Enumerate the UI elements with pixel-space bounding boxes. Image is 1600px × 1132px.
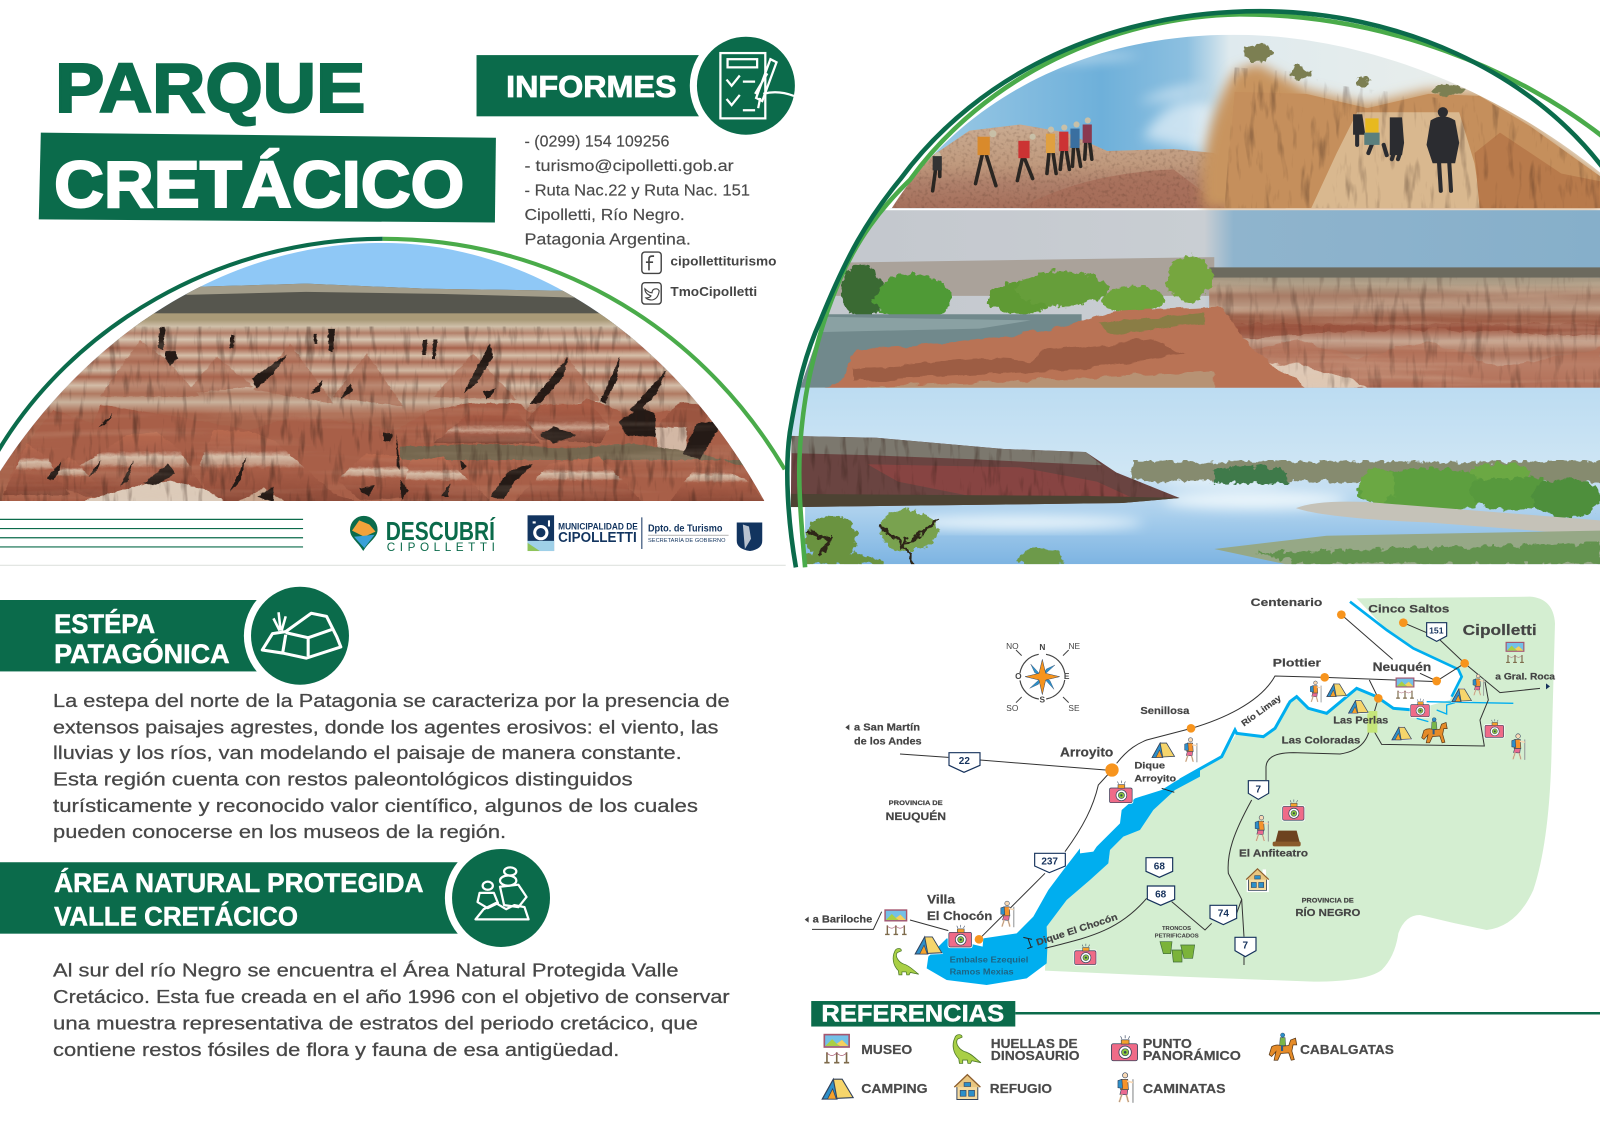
legend: referencias: DINOSAURIO [991, 1048, 1080, 1063]
contact information [524, 133, 750, 248]
map: compass [1006, 641, 1081, 713]
logo: Municipalidad de Cipolletti: CIPOLLETTI [558, 530, 637, 546]
map: place labels: a San Martín [854, 723, 920, 734]
map: place labels: Cinco Saltos [1368, 603, 1449, 615]
map: place labels: PROVINCIA DE [889, 800, 943, 807]
text block: Estepa description [53, 690, 730, 842]
title band: Cretácico: CRETÁCICO [54, 147, 464, 222]
map: place labels: PETRIFICADOS [1155, 934, 1199, 940]
icon: rocks and grass [262, 612, 341, 658]
legend: referencias: CAMINATAS [1143, 1081, 1226, 1096]
map: compass: N [1039, 642, 1045, 652]
map: reservoir and rivers [927, 602, 1513, 985]
map: compass: O [1015, 671, 1022, 681]
text block: Estepa description: La estepa del norte de la Patagonia se caracteriza por la presencia de [53, 690, 730, 711]
icon: amphitheatre rock [1273, 831, 1301, 846]
map: route numbers [959, 626, 1444, 952]
legend: referencias: HUELLAS DE [991, 1036, 1078, 1051]
map: place labels: TRONCOS [1162, 926, 1191, 932]
map: place labels: Las Perlas [1333, 716, 1389, 727]
map: place labels: Río Limay [1239, 693, 1283, 728]
logo: Descubrí Cipolletti [350, 516, 496, 554]
map: place labels: Ramos Mexias [950, 968, 1014, 977]
lower ridge [0, 398, 767, 503]
map: place labels: Plottier [1273, 658, 1322, 670]
upper pyramids [100, 340, 600, 410]
map: place labels: Dique [1134, 761, 1165, 771]
heading: Informes with icon [477, 30, 802, 142]
heading: Estepa Patagónica [0, 580, 356, 692]
heading: Estepa Patagónica: PATAGÓNICA [54, 639, 230, 669]
legend: referencias: PANORÁMICO [1143, 1048, 1241, 1063]
text block: Estepa description: pueden conocerse en los museos de la región. [53, 821, 506, 842]
text block: Área description: Al sur del río Negro se encuentra el Área Natural Protegida Valle [53, 960, 679, 981]
logo: Municipalidad de Cipolletti: Dpto. de Turismo [648, 524, 722, 535]
map: route numbers: 7 [1243, 941, 1249, 952]
photo row: hikers [890, 35, 1600, 210]
map: place labels: NEUQUÉN [886, 810, 946, 823]
photo row: river and canyon [796, 210, 1600, 394]
map: place labels: Embalse Ezequiel [950, 956, 1028, 965]
map: route numbers: 22 [959, 756, 970, 767]
map: place labels: Neuquén [1373, 660, 1431, 674]
photo row: river landscape [786, 388, 1600, 569]
legend: referencias: REFUGIO [990, 1081, 1052, 1096]
heading: Área Natural Protegida: ÁREA NATURAL PROTEGIDA [54, 868, 423, 898]
map: route numbers: 68 [1154, 861, 1165, 872]
map: place labels: Cipolletti [1463, 623, 1537, 639]
map: route shields [949, 623, 1447, 957]
heading: Estepa Patagónica: ESTÉPA [54, 609, 155, 639]
map: route numbers: 7 [1256, 784, 1262, 795]
legend: referencias [811, 1000, 1600, 1103]
photo: canyon dome [0, 243, 764, 501]
contact information: - turismo@cipolletti.gob.ar [524, 158, 734, 175]
map: land Río Negro [1045, 597, 1555, 982]
map: place labels: Dique El Chocón [1035, 912, 1119, 948]
text block: Estepa description: lluvias y los ríos, van modelando el paisaje de manera constante. [53, 742, 682, 763]
heading: Área Natural Protegida: VALLE CRETÁCICO [54, 902, 298, 932]
map: route numbers: 74 [1218, 909, 1229, 920]
text block: Estepa description: turísticamente y reconocido valor científico, algunos de los cuales [53, 795, 698, 816]
text block: Estepa description: extensos paisajes agrestes, donde los agentes erosivos: el viento, las [53, 717, 718, 738]
map: city dots [975, 610, 1469, 944]
social media links: cipollettiturismo [670, 253, 777, 268]
text block: Área description: contiene restos fósiles de flora y fauna de esa antigüedad. [53, 1039, 619, 1060]
map: route numbers: 68 [1155, 890, 1167, 901]
map: compass: SE [1068, 703, 1080, 713]
map: attraction icons [884, 642, 1525, 975]
map: place labels: El Anfiteatro [1239, 848, 1308, 859]
map: place labels: Senillosa [1140, 706, 1190, 717]
logo: Municipalidad de Cipolletti [528, 515, 762, 551]
photo collage: dome with three rows [786, 31, 1600, 569]
logo: Municipalidad de Cipolletti: MUNICIPALIDAD DE [558, 522, 638, 532]
legend: referencias: PUNTO [1143, 1036, 1192, 1051]
map: route numbers: 151 [1429, 626, 1444, 636]
text block: Área description: una muestra representativa de estratos del periodo cretácico, que [53, 1013, 698, 1034]
map: compass: NE [1069, 641, 1081, 651]
map: roads [812, 615, 1540, 965]
map: place labels: Arroyito [1134, 774, 1176, 784]
map: place labels: a Bariloche [813, 915, 873, 926]
logo: Municipalidad de Cipolletti: SECRETARÍA DE GOBIERNO [648, 537, 726, 544]
map: place labels: de los Andes [854, 737, 922, 748]
map: place labels: a Gral. Roca [1495, 671, 1556, 681]
text block: Área description [53, 960, 730, 1060]
contact information: Cipolletti, Río Negro. [524, 207, 685, 224]
map: compass: NO [1006, 641, 1019, 651]
text block: Área description: Cretácico. Esta fue creada en el año 1996 con el objetivo de conservar [53, 986, 730, 1007]
social media links: TmoCipolletti [670, 284, 757, 299]
map: Las Perlas highlight [1367, 711, 1377, 733]
map: place labels [805, 597, 1556, 977]
map: place labels: Villa [927, 892, 955, 906]
map [805, 597, 1556, 985]
legend: referencias: CAMPING [861, 1081, 928, 1096]
heading: Área Natural Protegida [0, 842, 557, 954]
contact information: - (0299) 154 109256 [524, 133, 670, 150]
hikers [933, 107, 1459, 191]
map: place labels: Centenario [1251, 597, 1322, 609]
title: Parque: PARQUE [55, 49, 365, 127]
social media links [642, 252, 777, 304]
legend: referencias: CABALGATAS [1300, 1042, 1394, 1057]
dome outline: right [787, 11, 1600, 567]
map: place labels: Las Coloradas [1282, 736, 1361, 747]
contact information: - Ruta Nac.22 y Ruta Nac. 151 [524, 182, 750, 199]
logo: Descubrí Cipolletti: DESCUBRÍ [386, 517, 496, 546]
map: place labels: El Chocón [927, 909, 992, 923]
contact information: Patagonia Argentina. [524, 231, 691, 248]
legend: referencias: REFERENCIAS [821, 1000, 1004, 1027]
mounds [50, 432, 203, 502]
dark shadows and gullies [47, 327, 723, 502]
map: place labels: PROVINCIA DE [1302, 898, 1354, 905]
logo: Descubrí Cipolletti: CIPOLLETTI [387, 541, 495, 554]
icon: petrified trunks [1160, 942, 1195, 962]
map: place labels: RÍO NEGRO [1295, 906, 1360, 919]
map: compass: SO [1006, 703, 1019, 713]
text block: Estepa description: Esta región cuenta con restos paleontológicos distinguidos [53, 769, 633, 790]
map: compass: S [1040, 695, 1046, 705]
map: place labels: Arroyito [1060, 746, 1114, 760]
icon: rock formations [476, 867, 529, 919]
dome outline: left [0, 239, 785, 469]
decorative lines block [0, 519, 303, 547]
heading: Informes with icon: INFORMES [506, 70, 677, 104]
legend: referencias: MUSEO [861, 1042, 912, 1057]
map: compass: E [1064, 671, 1070, 681]
map: route numbers: 237 [1041, 857, 1058, 868]
